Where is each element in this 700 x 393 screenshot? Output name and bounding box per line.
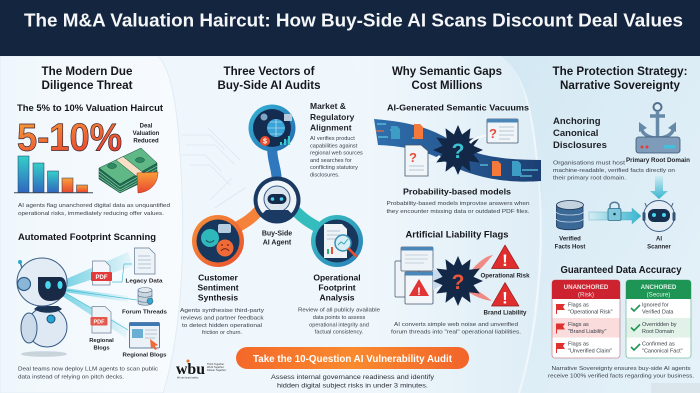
icon: vacuum burst <box>433 125 483 175</box>
icon: operational footprint circle <box>311 215 363 267</box>
text: organisations must host: Organisations must host <box>553 160 626 166</box>
header: unanchored: (Risk) <box>578 291 594 298</box>
panel: protection strategy background <box>500 56 700 393</box>
arrow: secure transfer with lock <box>589 202 641 224</box>
label: regional blogs: Blogs <box>93 346 110 352</box>
icon: browser with question <box>470 119 518 143</box>
header: anchored: (Secure) <box>647 291 670 298</box>
caption: deal valuation reduced: Deal <box>140 124 153 130</box>
icon: market and regulatory circle <box>248 104 296 152</box>
heading: operational footprint: Analysis <box>320 292 355 302</box>
caption: deal valuation reduced: Valuation <box>133 131 160 137</box>
call to action button: Take the 10-Question AI Vulnerability Audit <box>253 354 453 365</box>
text block: operational footprint analysis <box>298 272 380 336</box>
label: operational risk: Operational Risk <box>480 272 530 280</box>
text: haircut explanation: AI agents flag unanchored digital data as unquantified <box>18 203 170 209</box>
label: regional blogs: Regional <box>89 338 114 344</box>
body: market alignment: AI verifies product <box>310 136 355 142</box>
text: deal teams: Deal teams now deploy LLM agents to scan public <box>18 366 158 372</box>
body: market alignment: regional web sources <box>310 151 363 157</box>
icon: burst with question: ? <box>452 271 464 294</box>
rows: unanchored: Flags as <box>568 322 589 328</box>
heading: semantic gaps: Why Semantic Gaps <box>392 66 502 78</box>
text: probability explanation: Probability-based models improvise answers when <box>386 201 530 207</box>
label: AI scanner: Scanner <box>647 244 671 250</box>
panel: three vectors of buy-side AI audits <box>180 66 380 336</box>
subheading: anchoring canonical disclosures: Canonical <box>553 128 598 139</box>
body: customer sentiment: friction or churn. <box>202 330 242 336</box>
logo: wbu: Think Together. <box>207 362 225 366</box>
heading: customer sentiment: Sentiment <box>197 282 239 292</box>
icon: verified facts database <box>556 200 584 230</box>
subheading: anchoring canonical disclosures: Anchoring <box>553 116 601 127</box>
subheading: semantic vacuums: AI-Generated Semantic Vacuums <box>387 102 529 112</box>
text: narrative sovereignty summary: receive 100% verified facts regarding your business. <box>548 374 694 380</box>
body: customer sentiment: to detect hidden operational <box>182 323 262 329</box>
heading: three vectors: Three Vectors of <box>224 66 315 78</box>
subheading: automated footprint scanning: Automated Footprint Scanning <box>18 232 156 243</box>
icon: regional blogs PDF <box>90 306 111 333</box>
panel: the modern due diligence threat <box>14 66 170 380</box>
text: liabilities explanation: forum threads into "real" operational liabilities. <box>391 330 521 336</box>
label: verified facts host: Facts Host <box>555 244 585 250</box>
rows: unanchored: Flags as <box>568 302 589 308</box>
bar chart: declining value <box>14 156 93 193</box>
icon: PDF document <box>91 261 112 285</box>
label: primary root domain: Primary Root Domain <box>626 158 690 164</box>
icon: orange doc top <box>414 124 423 139</box>
rows: unanchored: "Brand Liability" <box>568 329 606 335</box>
title: The M&A Valuation Haircut: How Buy-Side AI Scans Discount Deal Values <box>24 10 683 30</box>
subheading: artificial liability flags: Artificial Liability Flags <box>406 230 508 240</box>
icon: blue doc bottom <box>512 161 521 176</box>
text: deal teams: data instead of relying on pitch decks. <box>18 374 124 380</box>
rows: anchored: Ignored for <box>642 302 669 308</box>
decorative circuit traces <box>182 128 245 208</box>
heading: three vectors: Buy-Side AI Audits <box>218 80 320 92</box>
subheading: valuation haircut: The 5% to 10% Valuation Haircut <box>17 103 163 113</box>
body: operational footprint: Review of all publicly available <box>298 308 380 314</box>
logo: wbu: wbu <box>176 361 205 378</box>
panel: due diligence background <box>0 56 183 393</box>
text: organisations must host: their primary root domain. <box>553 176 627 182</box>
icon: stacked windows: ! <box>417 286 421 298</box>
text block: market and regulatory alignment <box>310 101 363 178</box>
rows: unanchored: "Unverified Claim" <box>568 348 612 354</box>
heading: market alignment: Alignment <box>310 123 352 133</box>
label: legacy data: Legacy Data <box>126 278 163 284</box>
heading: market alignment: Regulatory <box>310 112 355 122</box>
heading: protection strategy: The Protection Strategy: <box>552 66 688 78</box>
panel: why semantic gaps cost millions <box>374 66 541 336</box>
icon: document with question: ? <box>409 150 417 165</box>
icon: browser window with cursor <box>130 322 160 350</box>
heading: modern due diligence threat: The Modern Due <box>42 66 132 78</box>
logo: wbu <box>176 360 227 380</box>
body: operational footprint: data points to assess <box>313 315 365 321</box>
icon: browser with question: ? <box>489 126 497 141</box>
call to action button <box>236 347 469 369</box>
text: probability explanation: they encounter missing data or outdated PDF files. <box>386 209 530 215</box>
body: market alignment: and searches for <box>310 158 352 164</box>
rows: unanchored: Flags as <box>568 342 589 348</box>
label: buy-side AI agent: AI Agent <box>263 240 292 246</box>
connectors between circles <box>228 145 326 232</box>
text block: customer sentiment synthesis <box>180 272 264 336</box>
label: buy-side AI agent: Buy-Side <box>262 230 292 238</box>
header: unanchored: UNANCHORED <box>564 284 609 291</box>
label: regional blogs 2: Regional Blogs <box>122 352 166 358</box>
big number: 5-10%: 5-10% <box>17 116 122 160</box>
icon: AI scanner robot <box>642 200 676 232</box>
text: liabilities explanation: AI converts simple web noise and unverified <box>394 322 518 328</box>
heading: guaranteed data accuracy: Guaranteed Data Accuracy <box>560 265 682 276</box>
panel: semantic gaps background <box>350 56 540 393</box>
icon: anchor on server <box>636 103 680 153</box>
table: anchored secure <box>626 280 691 358</box>
heading: market alignment: Market & <box>310 101 346 111</box>
subheading: anchoring canonical disclosures: Disclosures <box>553 140 607 151</box>
body: market alignment: disclosures. <box>310 172 340 178</box>
arrow: root domain to AI scanner <box>650 176 668 199</box>
icon: PDF document: PDF <box>96 275 108 281</box>
body: customer sentiment: reviews and partner feedback <box>180 315 264 321</box>
icon: market and regulatory circle: $ <box>263 138 267 146</box>
rows: anchored: "Canonical Fact" <box>642 348 683 354</box>
icon: blue doc top <box>391 126 400 139</box>
panel: protection strategy <box>548 66 694 380</box>
text: audit description: hidden digital subject risks in under 3 minutes. <box>277 382 428 390</box>
rows: anchored: Overridden by <box>642 322 677 328</box>
text: audit description: Assess internal governance readiness and identify <box>271 374 435 381</box>
icon: red swooshes <box>468 255 493 301</box>
rows: anchored: Root Domain <box>642 329 674 335</box>
label: AI scanner: AI <box>656 236 662 242</box>
icon: warning triangle brand liability: ! <box>502 288 508 308</box>
header band <box>0 0 700 56</box>
label: forum threads: Forum Threads <box>122 310 167 316</box>
icon: vacuum burst: ? <box>452 140 464 163</box>
icon: database <box>138 288 153 305</box>
table: unanchored risk <box>552 280 620 358</box>
rows: anchored: Confirmed as <box>642 342 675 348</box>
corner patch <box>651 383 700 393</box>
heading: protection strategy: Narrative Sovereignty <box>560 80 681 92</box>
heading: semantic gaps: Cost Millions <box>412 80 482 92</box>
icon: document with question <box>405 145 440 176</box>
logo: wbu: We are brand safety <box>177 376 199 380</box>
text: haircut explanation: operational risks, immediately reducing offer values. <box>18 211 164 217</box>
rows: unanchored: "Operational Risk" <box>568 310 613 316</box>
icons: green checks <box>631 305 640 350</box>
heading: operational footprint: Footprint <box>318 282 356 292</box>
icons: red flags <box>556 304 565 353</box>
icon: orange doc bottom <box>492 161 501 176</box>
icon: regional blogs PDF: PDF <box>94 320 105 326</box>
label: verified facts host: Verified <box>559 236 581 242</box>
text: organisations must host: machine-readable, verified facts directly on <box>553 168 675 174</box>
logo: wbu: Deliver Together. <box>207 368 227 372</box>
caption: deal valuation reduced: Reduced <box>133 139 159 145</box>
icon: scan beams <box>62 252 137 338</box>
heading: modern due diligence threat: Diligence Threat <box>42 80 133 92</box>
subheading: probability-based models: Probability-based models <box>403 186 511 196</box>
icon: customer sentiment circle <box>192 215 244 267</box>
icon: legacy data document <box>134 248 155 274</box>
body: customer sentiment: Agents synthesise third-party <box>180 308 264 314</box>
icon: cash stack with slice <box>99 148 158 193</box>
body: operational footprint: operational integrity and <box>309 322 369 328</box>
heading: customer sentiment: Synthesis <box>198 292 238 302</box>
body: market alignment: capabilities against <box>310 143 358 149</box>
label: brand liability: Brand Liability <box>484 310 527 316</box>
rows: anchored: Verified Data <box>642 310 674 316</box>
icon: warning triangle operational risk: ! <box>502 251 508 270</box>
heading: customer sentiment: Customer <box>198 272 239 282</box>
graphic: data stream with vacuum <box>374 119 541 182</box>
graphic: liability flags <box>395 245 519 308</box>
icon: robot scanner <box>17 258 67 357</box>
logo: wbu: Work Together. <box>207 365 225 369</box>
body: operational footprint: factual consistency. <box>315 330 364 336</box>
icon: central AI agent robot <box>254 176 300 224</box>
header: anchored: ANCHORED <box>641 284 677 291</box>
body: market alignment: conflicting statutory <box>310 165 358 171</box>
heading: operational footprint: Operational <box>313 272 361 282</box>
text: narrative sovereignty summary: Narrative Sovereignty ensures buy-side AI agents <box>552 366 691 372</box>
